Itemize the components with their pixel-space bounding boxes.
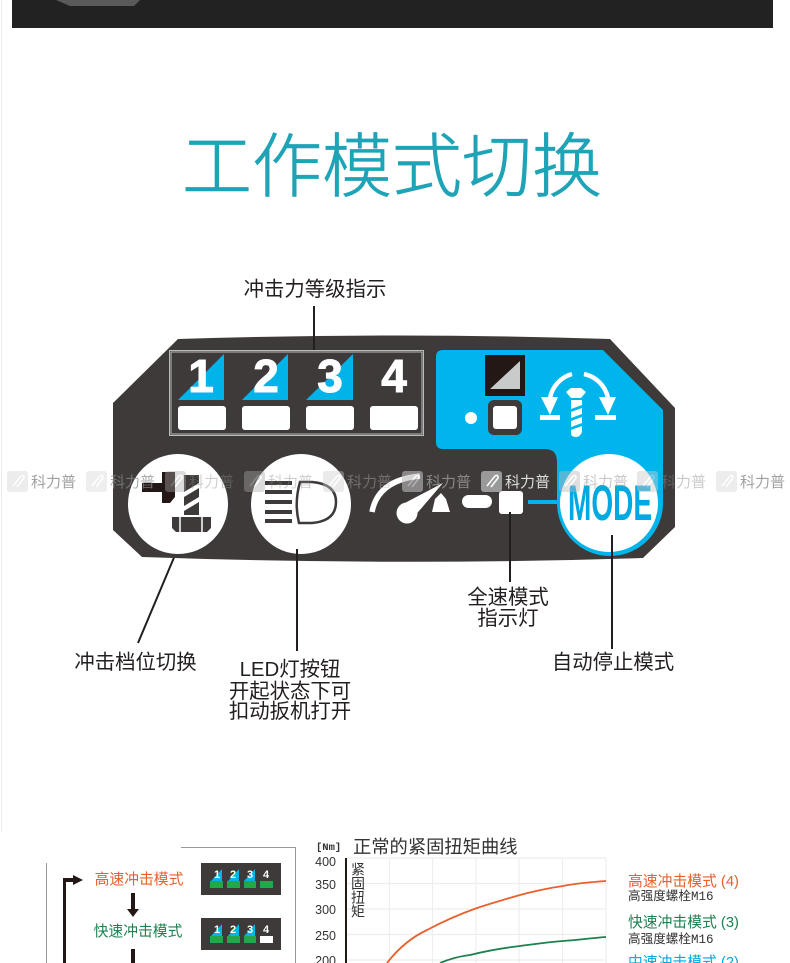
watermark row: 科力普 bbox=[661, 474, 706, 491]
watermark row: 科力普 bbox=[347, 474, 392, 491]
chart legend: 高强度螺栓M16 bbox=[628, 888, 713, 904]
watermark row: 科力普 bbox=[268, 474, 313, 491]
indicator: high speed bbox=[201, 863, 281, 895]
indicator: high speed: 1 bbox=[214, 869, 220, 881]
impact level indicator group: 2 bbox=[253, 350, 279, 402]
title: 工作模式切换 bbox=[182, 111, 602, 212]
y tick labels: 300 bbox=[315, 903, 336, 917]
label: LED button: 开起状态下可 bbox=[229, 680, 351, 703]
mode flow panel bbox=[46, 848, 296, 963]
chart legend: 快速冲击模式 (3) bbox=[628, 914, 739, 931]
y axis bbox=[345, 858, 347, 963]
indicator: fast: 1 bbox=[214, 924, 220, 936]
icon: screw with rotation arrows bbox=[540, 374, 616, 437]
chart legend bbox=[628, 873, 739, 963]
button: MODE: MODE bbox=[568, 475, 652, 531]
button: MODE bbox=[560, 454, 658, 552]
label: full speed mode lamp bbox=[467, 586, 549, 630]
blue mode area bbox=[436, 350, 663, 556]
button: impact gear bbox=[128, 454, 228, 554]
indicator: high speed: 4 bbox=[263, 869, 270, 881]
y tick labels bbox=[315, 855, 336, 963]
indicator: high speed: 2 bbox=[230, 869, 236, 881]
arrow: loop back bbox=[63, 875, 83, 963]
watermark row: 科力普 bbox=[31, 474, 76, 491]
impact level indicator group bbox=[170, 350, 424, 436]
fast mode label: 快速冲击模式 bbox=[94, 923, 183, 940]
indicator: fast: 3 bbox=[247, 924, 253, 936]
label: LED button bbox=[229, 658, 351, 723]
leader line: gear switch bbox=[138, 548, 178, 643]
watermark row: 科力普 bbox=[583, 474, 628, 491]
impact level indicator group: 3 bbox=[317, 350, 343, 402]
leader lines bbox=[297, 306, 612, 651]
torque chart bbox=[315, 836, 606, 963]
watermark row: 科力普 bbox=[110, 474, 155, 491]
y tick labels: 400 bbox=[315, 855, 336, 869]
indicator: fast: 2 bbox=[230, 924, 236, 936]
watermark row bbox=[7, 471, 785, 492]
watermark row: 科力普 bbox=[505, 474, 550, 491]
chart title: 正常的紧固扭矩曲线 bbox=[353, 836, 518, 857]
label: auto stop mode: 自动停止模式 bbox=[552, 651, 674, 674]
arrow: down continuing bbox=[131, 949, 135, 963]
control panel bbox=[113, 336, 675, 562]
impact level indicator group: 1 bbox=[188, 350, 214, 402]
watermark row: 科力普 bbox=[426, 474, 471, 491]
indicator: fast bbox=[201, 918, 281, 950]
indicator: high speed: 3 bbox=[247, 869, 253, 881]
y tick labels: 250 bbox=[315, 929, 336, 943]
icon: square indicator bbox=[465, 355, 525, 435]
chart legend: 高速冲击模式 (4) bbox=[628, 873, 739, 890]
watermark row: 科力普 bbox=[189, 474, 234, 491]
indicator: fast: 4 bbox=[263, 924, 270, 936]
orange curve bbox=[387, 881, 606, 963]
y axis title: 紧固扭矩 bbox=[350, 862, 366, 918]
arrow: down bbox=[127, 893, 139, 917]
label: impact level indicator: 冲击力等级指示 bbox=[244, 278, 386, 301]
label: full speed mode lamp: 指示灯 bbox=[477, 607, 539, 630]
full speed indicator bbox=[462, 491, 562, 514]
label: full speed mode lamp: 全速模式 bbox=[467, 586, 549, 609]
label: LED button: LED灯按钮 bbox=[240, 658, 340, 681]
button: LED light bbox=[251, 454, 351, 554]
chart legend: 高强度螺栓M16 bbox=[628, 931, 713, 947]
label: LED button: 扣动扳机打开 bbox=[229, 700, 351, 723]
label: impact gear switch: 冲击档位切换 bbox=[74, 651, 197, 674]
chart unit: [Nm] bbox=[316, 842, 341, 854]
watermark row: 科力普 bbox=[740, 474, 785, 491]
icon: speed gauge bbox=[372, 476, 450, 524]
y tick labels: 350 bbox=[315, 878, 336, 892]
high speed mode label: 高速冲击模式 bbox=[95, 871, 184, 888]
green curve bbox=[440, 937, 606, 963]
top dark banner bbox=[12, 0, 773, 28]
impact level indicator group: 4 bbox=[381, 350, 407, 402]
